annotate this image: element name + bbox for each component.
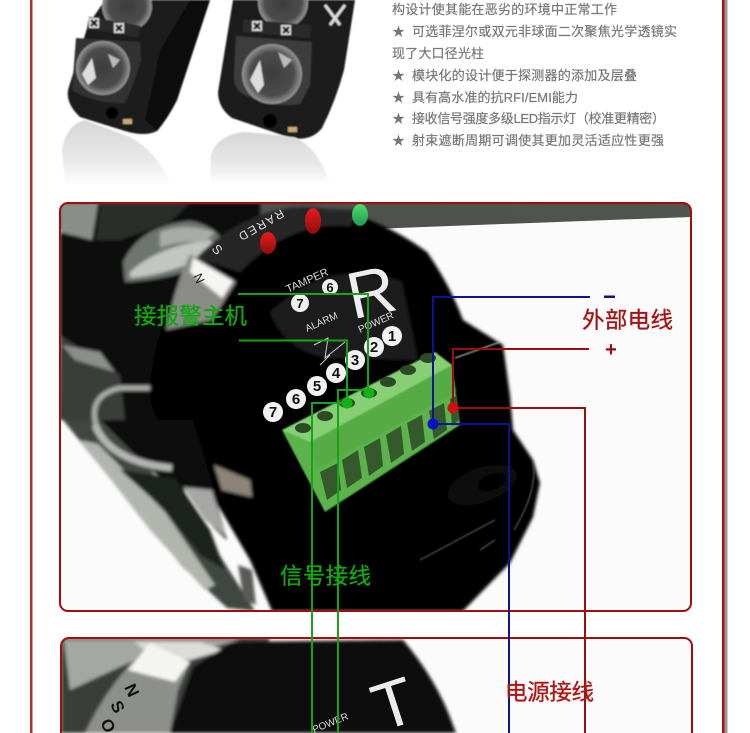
green terminal dot upper: [364, 388, 374, 398]
metal base edge: [63, 420, 255, 611]
feature line 5: ★: [392, 111, 405, 126]
product photo: right detector: [218, 0, 355, 139]
panel: transmitter photo: [61, 638, 692, 733]
feature line 2 continued: 现了大口径光柱: [392, 46, 484, 61]
TAMPER label: TAMPER: [284, 266, 330, 296]
background band: [60, 203, 691, 229]
label: minus sign: [604, 296, 615, 298]
base edge highlight: [420, 462, 534, 560]
terminal numbers: 1: [388, 328, 396, 345]
blue terminal dot: [428, 418, 438, 430]
printed circuit symbol: [314, 338, 345, 365]
box top edge highlight: [455, 342, 500, 358]
red terminal dot: [448, 402, 458, 414]
rear unit dark body: [60, 203, 260, 500]
tamper numbers: 6: [326, 280, 334, 295]
feature line 2: ★: [392, 24, 405, 39]
feature line 1: 构设计使其能在恶劣的环境中正常工作: [392, 2, 617, 17]
feature list: [392, 2, 677, 148]
dome ring top surface: [196, 208, 360, 272]
tan highlight: [214, 465, 252, 497]
ring text N: N: [190, 271, 208, 286]
rear unit lower reflections: [60, 335, 125, 420]
wires: red positive line: [453, 349, 589, 733]
green terminal dot lower: [342, 398, 352, 408]
rear lens: [123, 221, 226, 282]
outer page frame right rule: [722, 0, 728, 733]
product photo: left detector reflection: [62, 120, 172, 185]
terminal numbers: 2: [370, 339, 378, 356]
main housing: [150, 208, 540, 611]
tamper numbers: 7: [296, 296, 304, 311]
white cable: [94, 388, 150, 425]
base post: [238, 565, 256, 605]
product photo: right detector reflection: [210, 132, 330, 185]
red LED middle: [305, 208, 321, 234]
red LED left: [260, 232, 276, 254]
terminal numbers: 5: [313, 378, 321, 395]
product photo: left detector: [68, 0, 210, 134]
ring text S: S: [209, 241, 226, 258]
wires: blue negative line: [433, 297, 590, 733]
label plate: [270, 273, 418, 360]
terminal holes: [295, 353, 436, 433]
dome ring highlight: [166, 254, 236, 330]
side strip with holes: [153, 420, 227, 540]
panel: receiver wiring photo: [60, 203, 691, 611]
POWER label: POWER: [357, 310, 396, 336]
ring letter N: N: [120, 681, 143, 700]
label: plus sign: +: [605, 339, 617, 361]
terminal numbers: 6: [292, 391, 300, 408]
feature line 6: 射束遮断周期可调使其更加灵活适应性更强: [412, 133, 664, 148]
ring text RARED: RARED: [236, 206, 286, 244]
terminal numbers: 7: [269, 404, 277, 421]
feature line 6: ★: [392, 133, 405, 148]
outer page frame left rule: [30, 0, 32, 733]
label: external wires: 外部电线: [582, 308, 673, 333]
R mark: R: [340, 251, 402, 333]
ring letter S: S: [106, 698, 128, 716]
terminal numbers: 3: [351, 352, 359, 369]
feature line 3: 模块化的设计便于探测器的添加及层叠: [412, 68, 637, 83]
label: connect alarm host: 接报警主机: [134, 304, 247, 329]
feature line 2: 可选菲涅尔或双元非球面二次聚焦光学透镜实: [412, 24, 677, 39]
green LED: [352, 204, 368, 226]
tamper numbers: [291, 279, 338, 312]
rear unit top highlights: [60, 203, 98, 240]
label: power wiring: 电源接线: [505, 680, 594, 705]
terminal numbers: 4: [332, 365, 341, 382]
base bumps: [448, 464, 516, 506]
ALARM label: ALARM: [304, 311, 340, 335]
terminal numbers: [263, 326, 402, 422]
feature line 4: 具有高水准的抗RFI/EMI能力: [412, 90, 578, 105]
terminal slots: [320, 396, 459, 500]
feature line 4: ★: [392, 90, 405, 105]
label: signal wiring: 信号接线: [280, 564, 371, 589]
feature line 5: 接收信号强度多级LED指示灯（校准更精密）: [412, 111, 665, 126]
terminal block: [282, 352, 460, 512]
wires: green signal lines: [238, 294, 369, 733]
feature line 3: ★: [392, 68, 405, 83]
